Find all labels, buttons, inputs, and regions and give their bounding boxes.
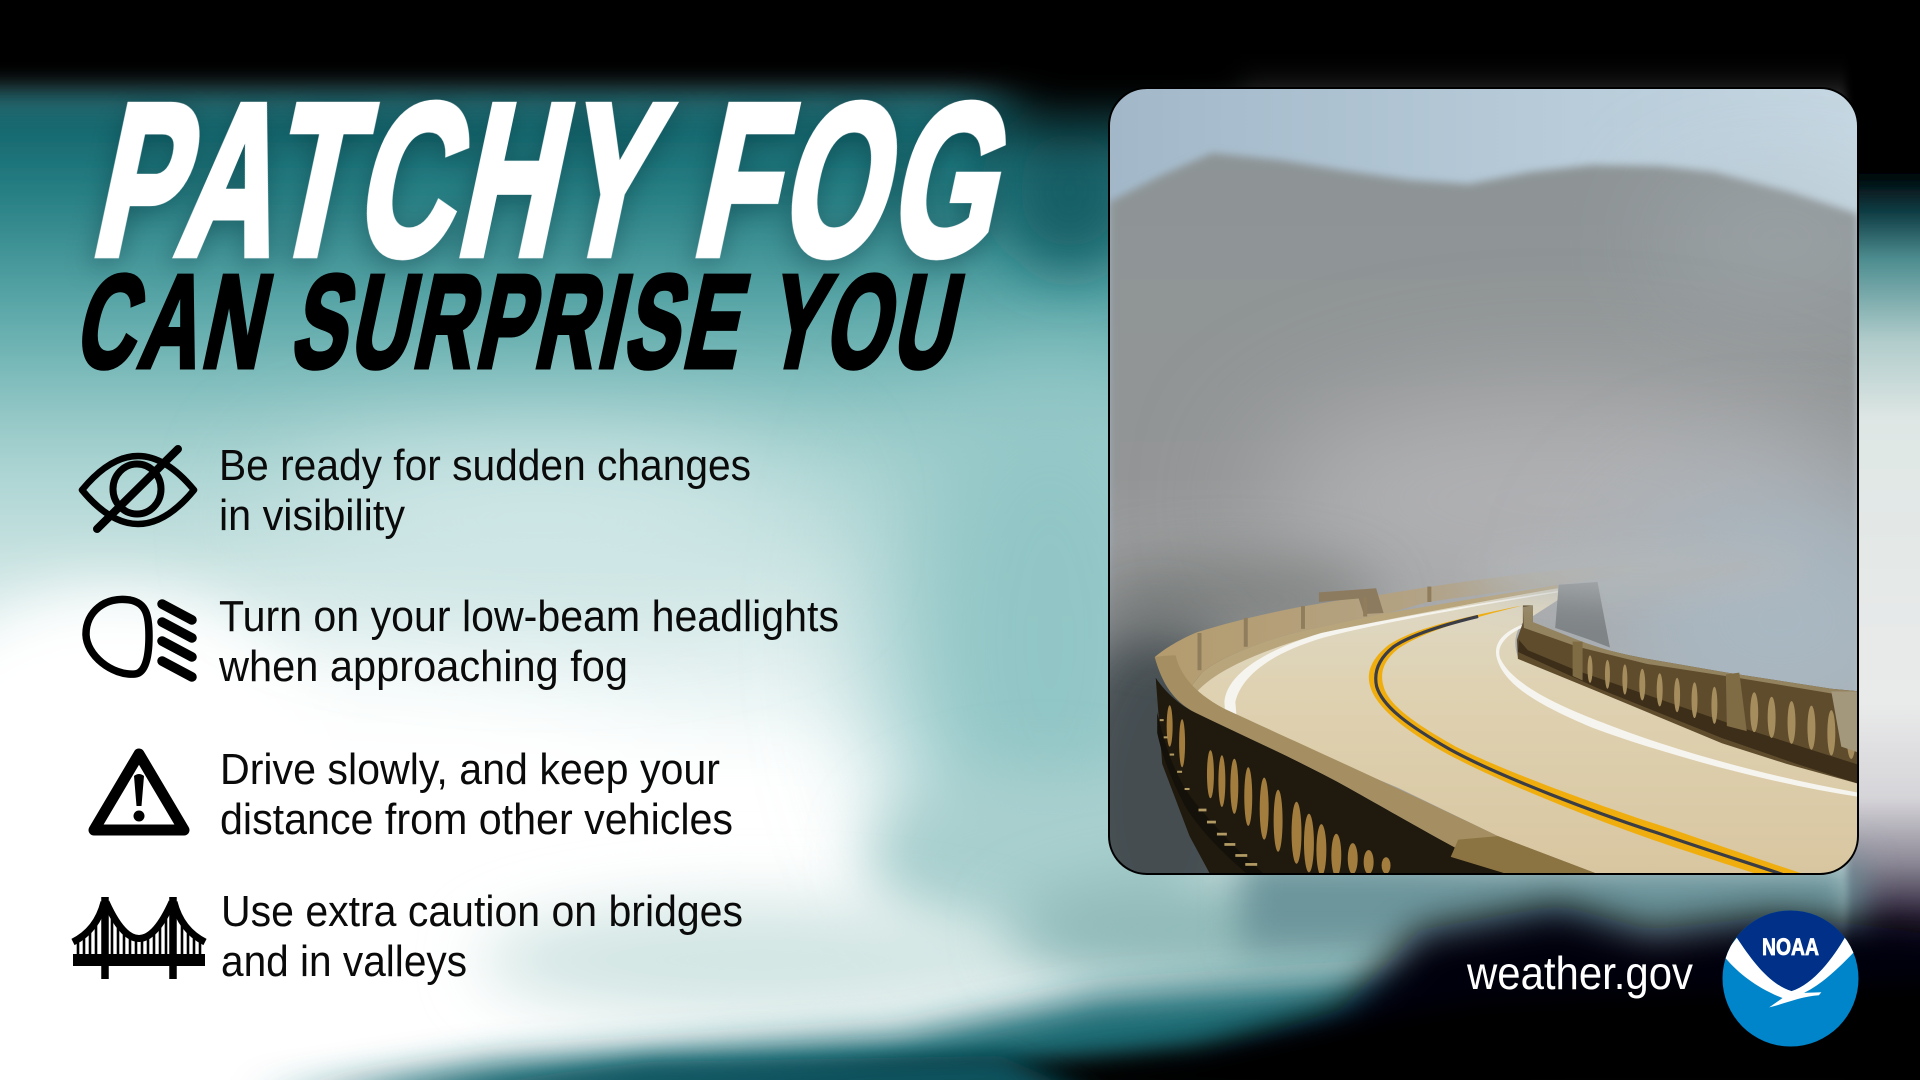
website label: weather.gov: [1466, 947, 1693, 999]
tip text: Drive slowly, and keep your: [220, 745, 720, 794]
tip text: Be ready for sudden changes: [219, 441, 751, 490]
icon: suspension bridge: [73, 897, 205, 979]
tip text: in visibility: [219, 491, 405, 540]
photo: foggy curved bridge: [1108, 87, 1859, 875]
tip text: Turn on your low-beam headlights: [219, 592, 839, 641]
title: Patchy Fog: PATCHY FOG: [79, 60, 1036, 300]
far left parapet: [1154, 574, 1542, 685]
double yellow centre line: [1369, 605, 1809, 876]
tip 1: sudden changes in visibility: [82, 441, 751, 540]
tip 2: low-beam headlights: [86, 592, 839, 691]
far parapet base: [1192, 584, 1558, 691]
white edge lines: [1224, 591, 1558, 720]
logo: NOAA: [1722, 910, 1858, 1046]
subtitle: Can Surprise You: CAN SURPRISE YOU: [67, 248, 978, 396]
tip 4: bridges and valleys: [73, 887, 743, 986]
tip text: when approaching fog: [218, 642, 628, 691]
icon: headlight: [86, 599, 192, 677]
icon: crossed eye: [82, 449, 194, 529]
tip text: and in valleys: [221, 937, 467, 986]
logo: NOAA: NOAA: [1762, 934, 1819, 961]
tip text: distance from other vehicles: [220, 795, 733, 844]
icon: warning triangle: [94, 754, 184, 830]
right parapet and footing: [1517, 605, 1861, 785]
distant bridge tower in fog: [1555, 582, 1610, 647]
road surface: [1197, 588, 1866, 876]
tip text: Use extra caution on bridges: [221, 887, 743, 936]
near left parapet: [1156, 678, 1518, 878]
tip 3: drive slowly: [94, 745, 733, 844]
